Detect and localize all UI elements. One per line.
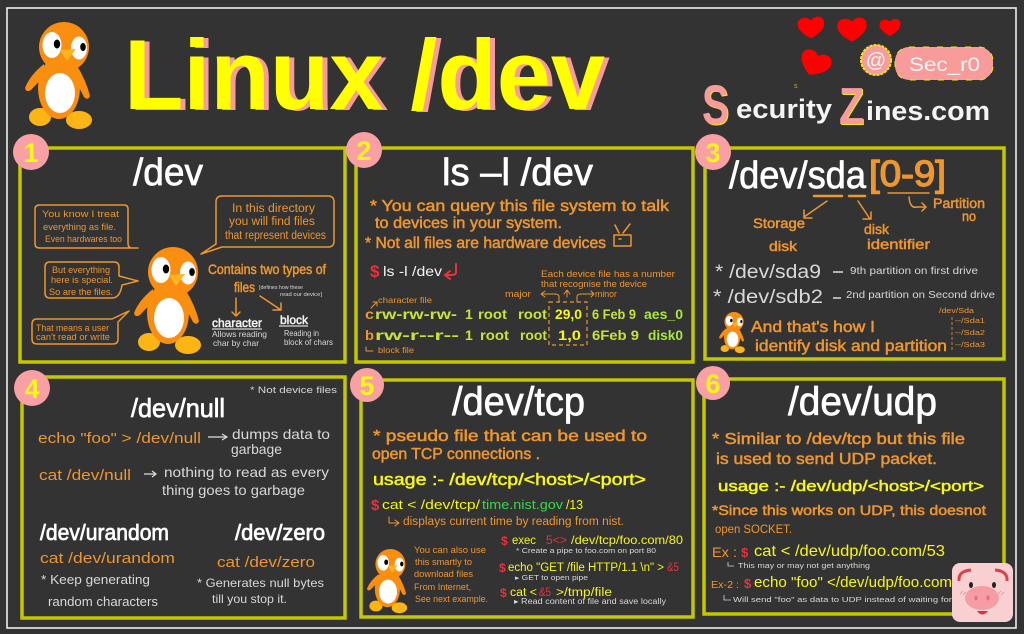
heading: /dev/sda (729, 155, 867, 197)
callout: user cannot read or write: can't read or write (36, 332, 110, 342)
site name: Z (839, 78, 864, 136)
callout: everything is special: So are the files. (49, 287, 113, 298)
command: $ (370, 262, 380, 281)
download note: You can also use (414, 545, 486, 555)
title: Linux /dev (124, 19, 605, 130)
command: cat to file: &5 (539, 587, 551, 599)
zero: till you stop it. (212, 592, 287, 606)
command: echo: echo "GET /file HTTP/1.1 \n" > (508, 562, 664, 574)
panel 1: /dev: 1 (23, 138, 39, 168)
listing row 2: 1 (465, 327, 473, 343)
type: character: character (212, 316, 262, 330)
command: cat: cat < /dev/tcp/ (382, 497, 480, 512)
callout: this directory: that represent devices (225, 230, 326, 242)
usage: usage :- /dev/tcp/<host>/<port> (373, 470, 646, 489)
listing row 2: b (365, 327, 374, 343)
urandom: random characters (48, 595, 158, 609)
intro text: * You can query this file system to talk (370, 198, 670, 215)
listing row 2: root (520, 327, 547, 343)
panel 3: /dev/sda[0-9] (695, 134, 1004, 359)
socket note (712, 502, 986, 536)
example 2 (711, 574, 953, 604)
panel 4: /dev/null: 4 (24, 374, 40, 404)
heading: /dev/tcp (452, 380, 585, 424)
download note: this smartly to (415, 557, 472, 567)
site name: S (702, 73, 729, 136)
zero: * Generates null bytes (197, 576, 324, 590)
file types heading: Contains two types of (208, 261, 326, 277)
panel 5: /dev/tcp: 5 (359, 371, 375, 401)
command: cat: time.nist.gov (482, 497, 564, 512)
dashed box (549, 302, 587, 345)
type: block: block of chars (284, 337, 333, 347)
type: block: block (280, 313, 309, 327)
urandom: cat /dev/urandom (40, 550, 175, 567)
type: block: Reading in (284, 328, 319, 338)
listing row 2: 1,0 (558, 327, 581, 343)
listing labels (366, 295, 432, 355)
command (370, 262, 456, 281)
label: disk identifier: identifier (867, 236, 930, 252)
label: storage disk: Storage (753, 215, 805, 231)
listing row 1: 29,0 (555, 306, 582, 322)
label: storage disk (753, 215, 805, 254)
intro text: to devices in your system. (375, 215, 562, 232)
title: Linux /dev (129, 20, 610, 131)
label: disk identifier (864, 221, 930, 252)
site name: Z (840, 79, 865, 137)
handle badge: Sec_r0 (909, 55, 980, 76)
null example 2 (39, 464, 329, 498)
zero (197, 520, 325, 606)
file types heading: [defines how these (259, 285, 303, 291)
example 2: Will send "foo" as data to UDP instead of waiting for (733, 595, 953, 604)
panel 3: /dev/sda[0-9]: 3 (705, 138, 721, 168)
command: echo: $ (499, 561, 506, 575)
panel 2: ls -l /dev: 2 (356, 136, 372, 166)
listing row 2 (365, 327, 683, 343)
listing row 1: 1 (465, 306, 473, 322)
site name: ines.com (866, 96, 990, 126)
listing row 2: 6Feb 9 (592, 327, 639, 343)
callout: this directory (201, 196, 334, 254)
icon: pig (952, 563, 1013, 622)
description: * Similar to /dev/tcp but this file (712, 431, 965, 448)
description: open TCP connections . (372, 446, 540, 463)
urandom (40, 520, 175, 609)
panel 4: /dev/null (14, 370, 345, 618)
socket note: *Since this works on UDP, this doesnot (712, 502, 986, 518)
example 2: Ex-2 : (711, 580, 739, 591)
null example 2: thing goes to garbage (162, 482, 305, 498)
panel 5: /dev/tcp (350, 368, 693, 617)
callout: this directory: In this directory (232, 203, 315, 215)
site name: ecurity (736, 94, 832, 124)
closing note: identify disk and partition (755, 338, 947, 355)
download note: From Internet, (414, 582, 471, 592)
icon: tv (614, 224, 631, 246)
callout: everything is special: But everything (52, 265, 110, 276)
command: cat (371, 497, 624, 528)
label: storage disk: disk (769, 238, 798, 254)
partition tree: /dev/Sda (939, 308, 974, 315)
penguin (367, 549, 407, 613)
examples: * /dev/sdb2 (713, 287, 823, 308)
command: exec: 5<> (546, 533, 567, 547)
example 1: cat < /dev/udp/foo.com/53 (754, 543, 945, 560)
example 1: $ (741, 545, 749, 560)
partition tree (939, 308, 985, 351)
listing row 2: disk0 (648, 327, 683, 343)
site name (702, 73, 990, 137)
null example 1: echo "foo" > /dev/null (38, 430, 201, 447)
intro text: * Not all files are hardware devices (365, 235, 606, 252)
intro text (365, 198, 670, 252)
command: exec: /dev/tcp/foo.com/80 (571, 533, 683, 547)
heading: /dev/udp (788, 380, 937, 424)
device number note: major (505, 289, 531, 299)
command: echo: ▸ GET to open pipe (515, 575, 588, 582)
hearts (795, 17, 900, 81)
callout: treat everything as file (35, 205, 138, 248)
label: partition: no (962, 208, 976, 224)
command: cat to file: >/tmp/file (556, 587, 612, 599)
listing row 1 (365, 306, 683, 322)
command: exec (501, 533, 683, 555)
description: is used to send UDP packet. (716, 451, 937, 468)
listing labels: character file (378, 295, 432, 305)
type: block (279, 313, 333, 347)
description (372, 428, 647, 463)
command: cat: $ (371, 497, 380, 514)
note: * Not device files (250, 385, 337, 396)
listing row 1: root (478, 306, 507, 322)
callout: user cannot read or write (32, 311, 129, 344)
command: cat to file: $ (500, 586, 507, 600)
command: cat: displays current time by reading from nist. (403, 516, 624, 528)
examples: 2nd partition on Second drive (846, 290, 995, 301)
partition tree: --/Sda2 (955, 330, 985, 337)
usage: usage :- /dev/udp/<host>/<port> (718, 478, 984, 495)
description (712, 431, 965, 468)
command: cat to file (500, 586, 666, 606)
handle badge (861, 45, 993, 80)
listing row 1: aes_0 (644, 306, 683, 322)
heading: /dev/null (131, 393, 225, 423)
closing note (751, 319, 947, 355)
null example 1: dumps data to (232, 426, 330, 442)
command: echo: &5 (667, 562, 679, 574)
penguin (134, 247, 201, 354)
panel 6: /dev/udp: 6 (705, 369, 721, 399)
listing row 2: root (480, 327, 509, 343)
command: ls -l /dev (383, 263, 442, 279)
example 2: echo "foo" </dev/udp/foo.com (754, 574, 952, 591)
label: partition: Partition (933, 195, 985, 211)
command: cat to file: cat < (510, 587, 537, 599)
null example 1: garbage (231, 441, 282, 457)
null example 1 (38, 426, 330, 457)
panel 1: /dev (13, 134, 345, 362)
site name: S (703, 74, 730, 137)
zero: cat /dev/zero (217, 554, 315, 571)
panel 2: ls -l /dev (346, 132, 693, 362)
label: partition (933, 195, 985, 224)
heading: /dev (133, 152, 203, 194)
file types heading (208, 261, 326, 298)
panel 6: /dev/udp (696, 366, 1004, 614)
urandom: * Keep generating (41, 573, 150, 587)
device number note: Each device file has a number (541, 269, 675, 280)
partition tree: --/Sda1 (955, 318, 985, 325)
mascot: penguin (25, 22, 92, 129)
command: exec: $ (501, 534, 508, 548)
closing note: And that's how I (751, 319, 875, 336)
listing row 1: c (365, 306, 374, 322)
handle badge: @ (866, 50, 886, 72)
examples: * /dev/sda9 (715, 262, 821, 283)
label: disk identifier: disk (864, 221, 890, 237)
partition tree: --/Sda3 (955, 342, 985, 349)
heading: ls –l /dev (442, 152, 593, 194)
callout: everything is special (45, 262, 138, 298)
callout: treat everything as file: You know I treat (42, 209, 119, 220)
listing labels: block file (378, 345, 414, 355)
site name: s (794, 83, 798, 90)
example 2: $ (744, 576, 752, 591)
example 1: This may or may not get anything (738, 561, 870, 570)
penguin (719, 312, 745, 353)
callout: everything is special: here is special. (51, 275, 113, 286)
device number note: that recognise the device (541, 279, 647, 290)
listing row 1: root (518, 306, 547, 322)
command: cat: /13 (566, 497, 583, 512)
callout: treat everything as file: everything as file. (43, 222, 116, 233)
listing row 1: rw-rw-rw- (375, 306, 457, 322)
examples (713, 262, 995, 308)
type: character: char by char (213, 338, 259, 348)
description: * pseudo file that can be used to (373, 428, 647, 445)
device number note (505, 269, 675, 302)
command: echo (499, 561, 679, 582)
file types heading: files (234, 279, 255, 295)
command: exec: * Create a pipe to foo.com on port 80 (516, 548, 656, 555)
type: character: Allows reading (212, 329, 267, 339)
example 1 (712, 543, 945, 570)
download note: download files (414, 569, 474, 579)
urandom: /dev/urandom (40, 520, 169, 545)
callout: user cannot read or write: That means a user (36, 323, 109, 333)
listing row 1: 6 Feb 9 (592, 306, 636, 322)
heading (729, 153, 946, 197)
zero: /dev/zero (235, 520, 325, 545)
file types heading: read our device] (280, 292, 323, 298)
command: exec: exec (512, 533, 536, 547)
null example 2: cat /dev/null (39, 467, 131, 484)
annotation arrows (814, 195, 865, 197)
callout: this directory: you will find files (229, 216, 315, 228)
callout: treat everything as file: Even hardwares too (45, 234, 122, 245)
listing row 2: rw-r--r-- (375, 327, 460, 343)
examples: 9th partition on first drive (850, 266, 979, 277)
arrows to file types (232, 296, 281, 316)
download note (414, 545, 488, 604)
heading: [0-9] (869, 153, 946, 194)
null example 2: nothing to read as every (164, 464, 329, 480)
command: cat to file: ▸ Read content of file and save locally (514, 597, 666, 606)
socket note: open SOCKET. (715, 522, 792, 536)
example 1: Ex : (712, 544, 737, 560)
download note: See next example. (415, 594, 488, 604)
device number note: minor (595, 289, 617, 299)
type: character (212, 316, 267, 348)
